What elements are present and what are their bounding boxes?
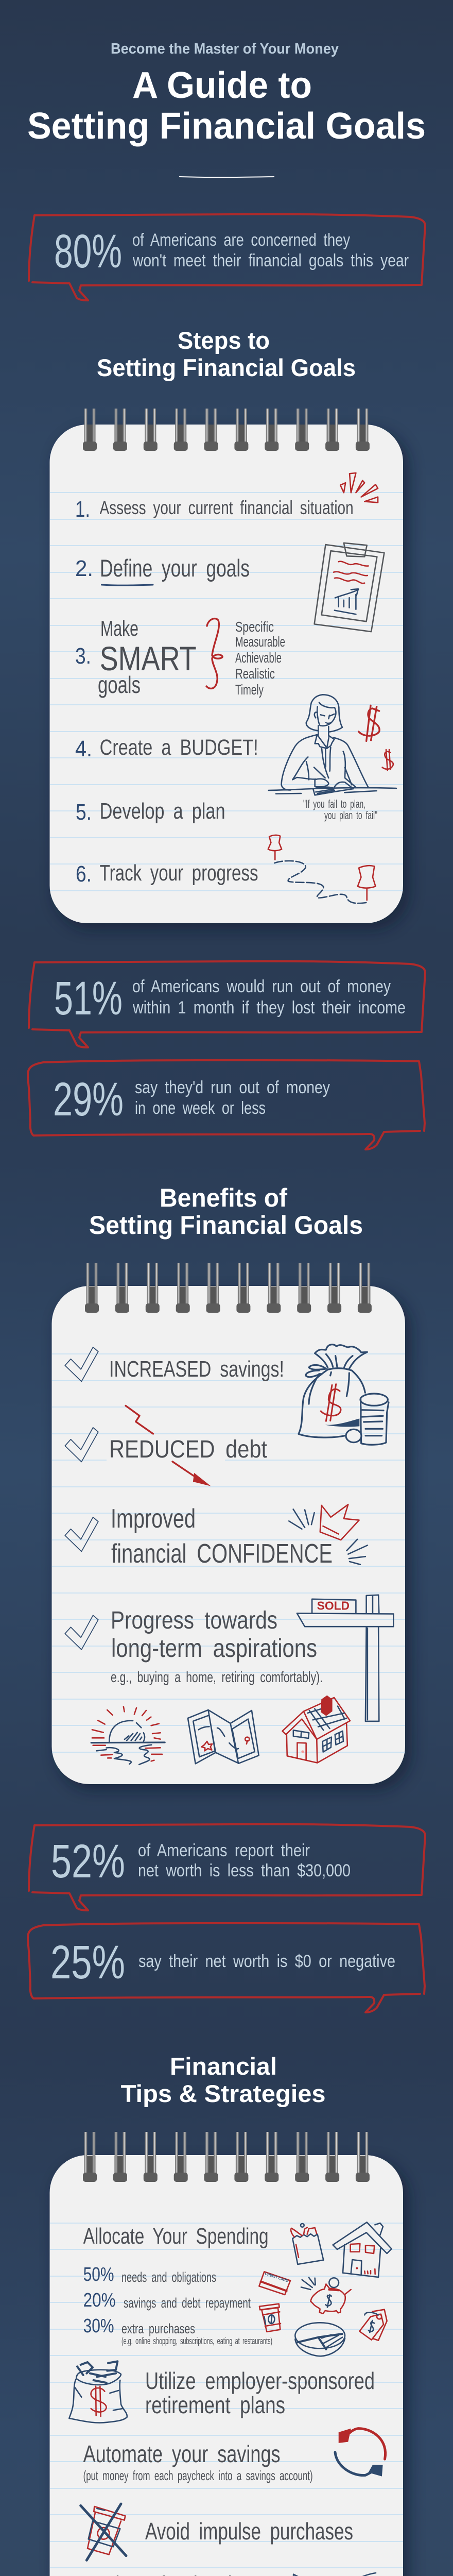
step 1: Assess your current financial situation [100, 497, 354, 518]
icon: clipboard [315, 543, 384, 632]
SMART list [235, 619, 285, 698]
heading: tips: Financial [170, 2053, 277, 2080]
step 3: SMART goals [75, 616, 285, 698]
notebook shadow [55, 2161, 410, 2576]
icon: house [282, 1696, 350, 1763]
callout: 52%: net worth is less than $30,000 [138, 1861, 351, 1880]
icon: grocery bag [291, 2224, 323, 2264]
heading: tips [121, 2053, 326, 2107]
callout: 51%: of Americans would run out of money [132, 977, 391, 996]
callout: 29%: in one week or less [135, 1098, 266, 1118]
icon: sold sign [297, 1595, 393, 1721]
callout: 52%: 52% [51, 1835, 125, 1888]
benefit 4: long-term aspirations [111, 1634, 317, 1663]
icon: brace [206, 619, 222, 688]
step 2 [75, 554, 250, 585]
title line 1: A Guide to [132, 65, 312, 106]
tip: allocate spending: 20% [83, 2290, 116, 2311]
icon: burst [340, 473, 378, 502]
stat 80%: 80% [54, 225, 122, 278]
icon: money bag [299, 1345, 389, 1445]
step 5 [76, 799, 225, 825]
tip: allocate spending: Allocate Your Spending [83, 2224, 269, 2249]
tip: allocate spending: (e.g. online shopping, subscriptions, eating at restaurants) [121, 2336, 272, 2346]
step 4: Create a BUDGET! [100, 735, 258, 760]
icon: red down arrow [126, 1405, 211, 1486]
subtitle: Become the Master of Your Money [111, 41, 339, 57]
benefit 4 [65, 1607, 323, 1686]
step 3: SMART goals: Make [100, 616, 138, 640]
benefit 2: REDUCED debt [109, 1436, 267, 1463]
icon group: spending items [259, 2222, 392, 2356]
header: title block [27, 41, 426, 177]
tip: allocate spending: savings and debt repayment [124, 2295, 251, 2311]
heading: steps: Steps to [178, 327, 270, 354]
callout: 25%: say their net worth is $0 or negative [138, 1952, 395, 1971]
notebook paper [49, 2155, 403, 2576]
tip: allocate spending: needs and obligations [121, 2269, 216, 2285]
icon: map [188, 1710, 259, 1764]
icon: cycle arrows [335, 2429, 386, 2477]
step 2: Define your goals [100, 554, 250, 582]
benefit 4: e.g., buying a home, retiring comfortably). [111, 1669, 323, 1686]
icon: crown [289, 1504, 368, 1565]
SMART list: Specific [235, 619, 274, 635]
icon: handshake [277, 2573, 385, 2576]
step 6 [76, 860, 258, 887]
benefit 4: Progress towards [111, 1607, 277, 1634]
tip: automate savings: (put money from each paycheck into a savings account) [83, 2468, 313, 2483]
step 6: Track your progress [100, 860, 258, 886]
icon: sold sign: SOLD [317, 1599, 350, 1613]
panel: tips notebook [49, 2132, 410, 2576]
icon: crossed coffee cup [81, 2504, 126, 2560]
callout: 29%: 29% [53, 1073, 124, 1126]
SMART list: Achievable [235, 650, 282, 666]
SMART list: Realistic [235, 666, 275, 682]
heading: benefits [89, 1183, 363, 1240]
step 1 [75, 497, 354, 522]
step 4: 4. [75, 736, 92, 761]
step 4 [75, 735, 258, 761]
icon: price tag [359, 2310, 387, 2341]
step 5: 5. [76, 800, 92, 825]
title line 2: Setting Financial Goals [27, 106, 426, 147]
notebook paper [51, 1286, 405, 1784]
benefit 3: financial CONFIDENCE [111, 1539, 333, 1569]
benefit 2 [65, 1428, 267, 1463]
callout: 51%: within 1 month if they lost their income [132, 998, 406, 1018]
callout: 25% [28, 1923, 425, 2012]
step 2: 2. [75, 556, 93, 581]
callout: 29%: say they'd run out of money [135, 1078, 330, 1097]
step 3: SMART goals: SMART [100, 639, 197, 677]
tip: allocate spending [83, 2224, 272, 2346]
step 3: SMART goals: goals [98, 671, 141, 698]
spiral rings [83, 2132, 370, 2182]
heading: benefits: Benefits of [160, 1183, 287, 1212]
panel: steps notebook [49, 409, 410, 929]
notebook shadow [55, 431, 410, 929]
step 3: SMART goals: 3. [75, 643, 91, 669]
icon: pie chart [295, 2323, 345, 2356]
tip: automate savings: Automate your savings [83, 2441, 281, 2467]
icon: sunset [91, 1707, 165, 1765]
SMART list: Measurable [235, 634, 285, 650]
tip: retirement plans: Utilize employer-sponsored [145, 2367, 375, 2394]
step 6: 6. [76, 861, 92, 887]
callout: 51% [29, 961, 425, 1047]
icon: piggy bank [301, 2278, 351, 2314]
callout: 51%: 51% [54, 972, 123, 1025]
icon: coffee cup [259, 2304, 281, 2332]
heading: steps [97, 327, 356, 381]
tip: allocate spending: extra purchases [121, 2321, 195, 2336]
quote: you plan to fail" [324, 809, 377, 822]
tip: retirement plans [145, 2367, 375, 2418]
callout: 29% [28, 1060, 425, 1149]
spiral rings [85, 1263, 372, 1313]
icon: cash bag [69, 2361, 127, 2423]
icon: house [333, 2222, 392, 2277]
callout: 52%: of Americans report their [138, 1841, 310, 1860]
step 1: 1. [75, 497, 90, 522]
callout: 25%: 25% [50, 1936, 125, 1989]
benefit 1: INCREASED savings! [109, 1357, 284, 1382]
heading: steps: Setting Financial Goals [97, 354, 356, 381]
callout text: of Americans are concerned they [132, 230, 350, 250]
quote [303, 798, 377, 822]
notebook shadow [57, 1292, 412, 1790]
benefit 3: Improved [111, 1504, 196, 1534]
benefit 3 [65, 1504, 333, 1569]
heading: tips: Tips & Strategies [121, 2080, 326, 2107]
SMART list: Timely [235, 682, 264, 698]
tip: allocate spending: 50% [83, 2264, 114, 2285]
heading: benefits: Setting Financial Goals [89, 1211, 363, 1240]
callout: 52% [29, 1824, 425, 1910]
panel: benefits notebook [51, 1263, 412, 1790]
tip: automate savings [83, 2441, 313, 2483]
tip: allocate spending: 30% [83, 2315, 114, 2337]
tip: avoid impulse purchases: Avoid impulse purchases [145, 2518, 353, 2545]
benefit 1 [65, 1347, 284, 1382]
icon: pins and path [268, 835, 376, 903]
tip: retirement plans: retirement plans [145, 2392, 285, 2418]
step 5: Develop a plan [100, 799, 225, 824]
icon: credit card: CREDIT CARD [264, 2272, 289, 2283]
icon: credit card [259, 2272, 290, 2295]
callout: 80% of Americans [29, 214, 425, 300]
illustration: woman planning [269, 694, 396, 795]
notebook paper [49, 425, 403, 923]
quote: "If you fail to plan, [303, 798, 365, 810]
spiral rings [83, 409, 370, 451]
